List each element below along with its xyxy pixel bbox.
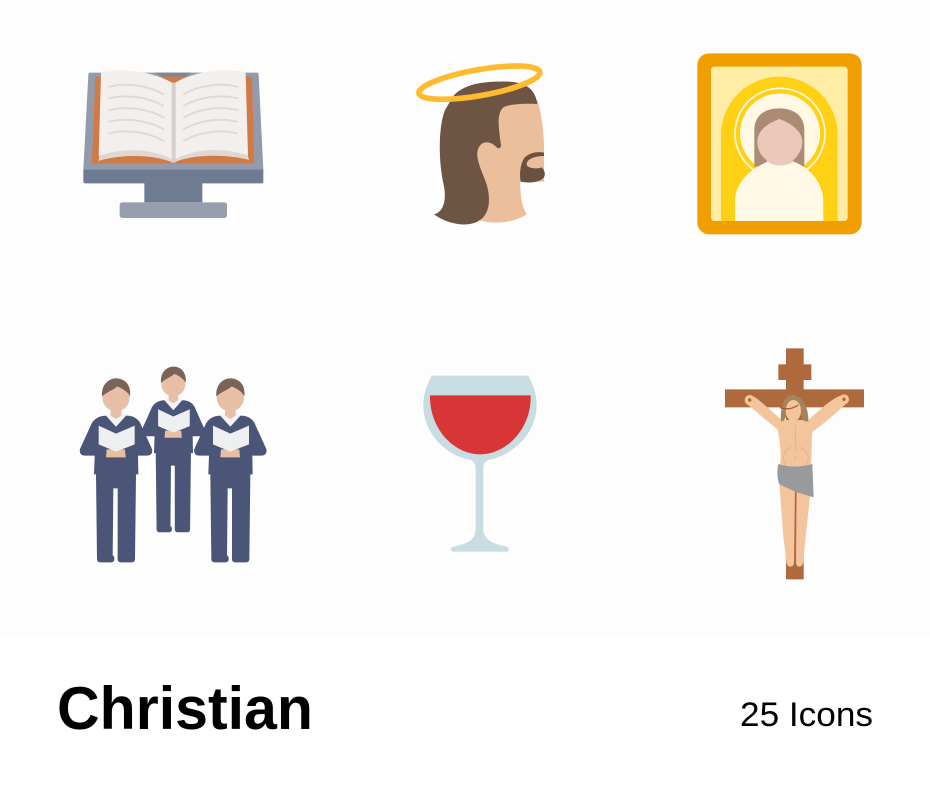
- icon: head with halo: [417, 59, 545, 224]
- icon: framed saint portrait: [697, 53, 862, 234]
- icon count: 25 Icons: [740, 696, 873, 734]
- icon: choir of three singers: [80, 367, 267, 562]
- singer: middle: [141, 367, 205, 532]
- icon: open book on lectern: [83, 70, 263, 218]
- singer: left: [80, 378, 152, 562]
- singer: right: [194, 378, 267, 562]
- icon: wine glass: [423, 376, 537, 552]
- icon: crucifix: [725, 348, 864, 579]
- title: Christian: [57, 675, 313, 742]
